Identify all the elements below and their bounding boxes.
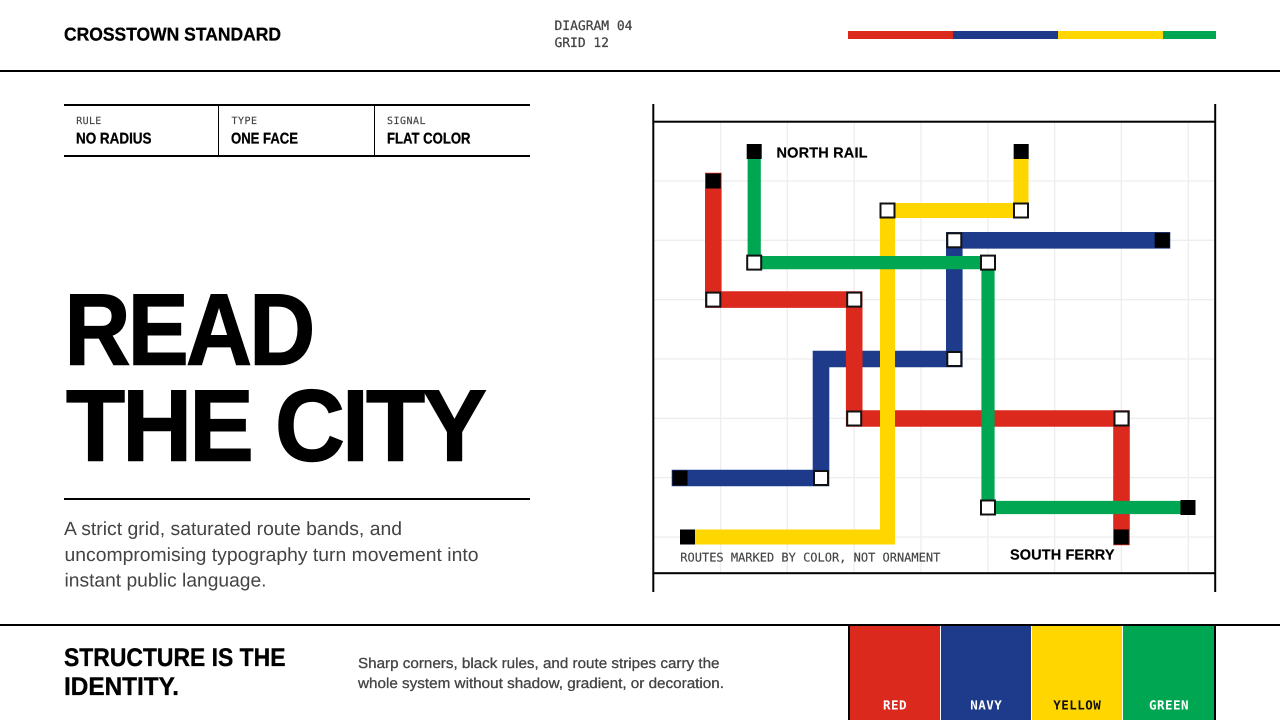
stat: rule xyxy=(76,116,152,148)
swatch: yellow xyxy=(1032,626,1122,720)
map frame xyxy=(652,104,1216,592)
navy route xyxy=(680,240,1162,478)
swatch: red xyxy=(850,626,940,720)
footer band xyxy=(0,624,1280,720)
swatch: navy xyxy=(941,626,1031,720)
footer description xyxy=(357,656,724,692)
intro paragraph xyxy=(64,519,478,592)
swatch: yellow: YELLOW xyxy=(1053,698,1101,712)
route color stripe xyxy=(848,31,1216,39)
green route xyxy=(754,152,1188,508)
swatch: green: GREEN xyxy=(1149,698,1188,712)
stat: signal xyxy=(387,116,470,148)
red route xyxy=(713,181,1122,537)
route map diagram xyxy=(652,104,1216,592)
yellow route xyxy=(688,152,1021,537)
map caption: ROUTES MARKED BY COLOR, NOT ORNAMENT xyxy=(680,550,940,564)
intro paragraph: A strict grid, saturated route bands, and xyxy=(64,519,402,540)
footer heading: STRUCTURE IS THE xyxy=(64,644,286,672)
footer heading: IDENTITY. xyxy=(64,673,179,701)
headline: READ xyxy=(64,272,312,386)
map grid xyxy=(654,122,1214,573)
diagram meta xyxy=(554,19,633,51)
interchange stations xyxy=(706,204,1128,514)
swatch: green xyxy=(1123,626,1214,720)
header band xyxy=(0,19,1280,72)
swatch: red: RED xyxy=(883,698,906,712)
diagram meta: GRID 12 xyxy=(554,36,609,51)
footer heading xyxy=(64,644,286,701)
stat: type xyxy=(231,116,298,148)
stat: rule: NO RADIUS xyxy=(76,130,152,148)
diagram meta: DIAGRAM 04 xyxy=(554,19,633,34)
label: south ferry: SOUTH FERRY xyxy=(1010,547,1115,563)
intro paragraph: instant public language. xyxy=(64,570,266,592)
swatch: navy: NAVY xyxy=(970,698,1002,712)
terminal stations xyxy=(672,144,1196,544)
stat: signal: SIGNAL xyxy=(387,116,426,127)
headline: THE CITY xyxy=(66,368,486,482)
stat: signal: FLAT COLOR xyxy=(387,130,470,148)
headline xyxy=(64,272,486,482)
label: north rail: NORTH RAIL xyxy=(776,145,868,161)
stat strip xyxy=(64,104,530,157)
color swatches xyxy=(848,626,1216,720)
footer description: Sharp corners, black rules, and route stripes carry the xyxy=(358,656,720,672)
intro paragraph: uncompromising typography turn movement into xyxy=(64,545,478,566)
stat: type: TYPE xyxy=(232,116,257,127)
brand name: CROSSTOWN STANDARD xyxy=(64,24,281,45)
stat: type: ONE FACE xyxy=(231,130,298,148)
stat: rule: RULE xyxy=(76,116,101,127)
footer description: whole system without shadow, gradient, or decoration. xyxy=(357,676,724,692)
